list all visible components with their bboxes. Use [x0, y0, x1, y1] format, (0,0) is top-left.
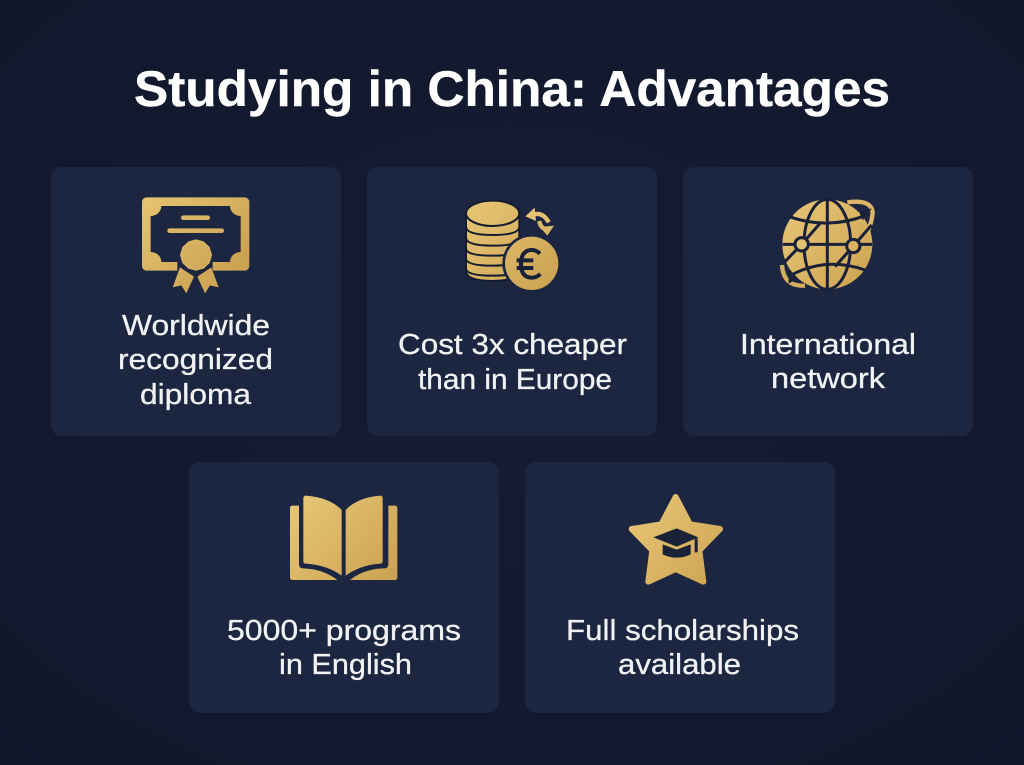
label	[740, 329, 916, 395]
label: recognized	[118, 344, 273, 376]
icon: coin stack with euro	[466, 201, 561, 293]
panel: worldwide recognized diploma	[51, 167, 341, 436]
panel: 5000+ programs in English	[189, 462, 499, 713]
label: International	[740, 329, 916, 361]
label	[227, 615, 461, 681]
icon: globe with network nodes	[782, 199, 873, 289]
label: available	[618, 649, 741, 681]
panel: cost 3x cheaper	[367, 167, 657, 436]
label: Cost 3x cheaper	[398, 329, 627, 361]
icon: open book	[290, 496, 397, 580]
label: than in Europe	[418, 364, 612, 396]
label: network	[771, 363, 886, 395]
label	[398, 329, 627, 396]
label	[566, 615, 799, 681]
label: Full scholarships	[566, 615, 799, 647]
icon: star with graduation cap	[632, 497, 720, 582]
label: in English	[279, 649, 412, 681]
label: Worldwide	[122, 310, 270, 342]
label	[118, 310, 273, 411]
label: diploma	[140, 379, 252, 411]
panel: international network	[683, 167, 973, 436]
label: 5000+ programs	[227, 615, 461, 647]
icon: diploma with ribbon seal	[142, 197, 249, 293]
panel: full scholarships available	[525, 462, 835, 713]
title: Studying in China: Advantages	[134, 61, 890, 117]
